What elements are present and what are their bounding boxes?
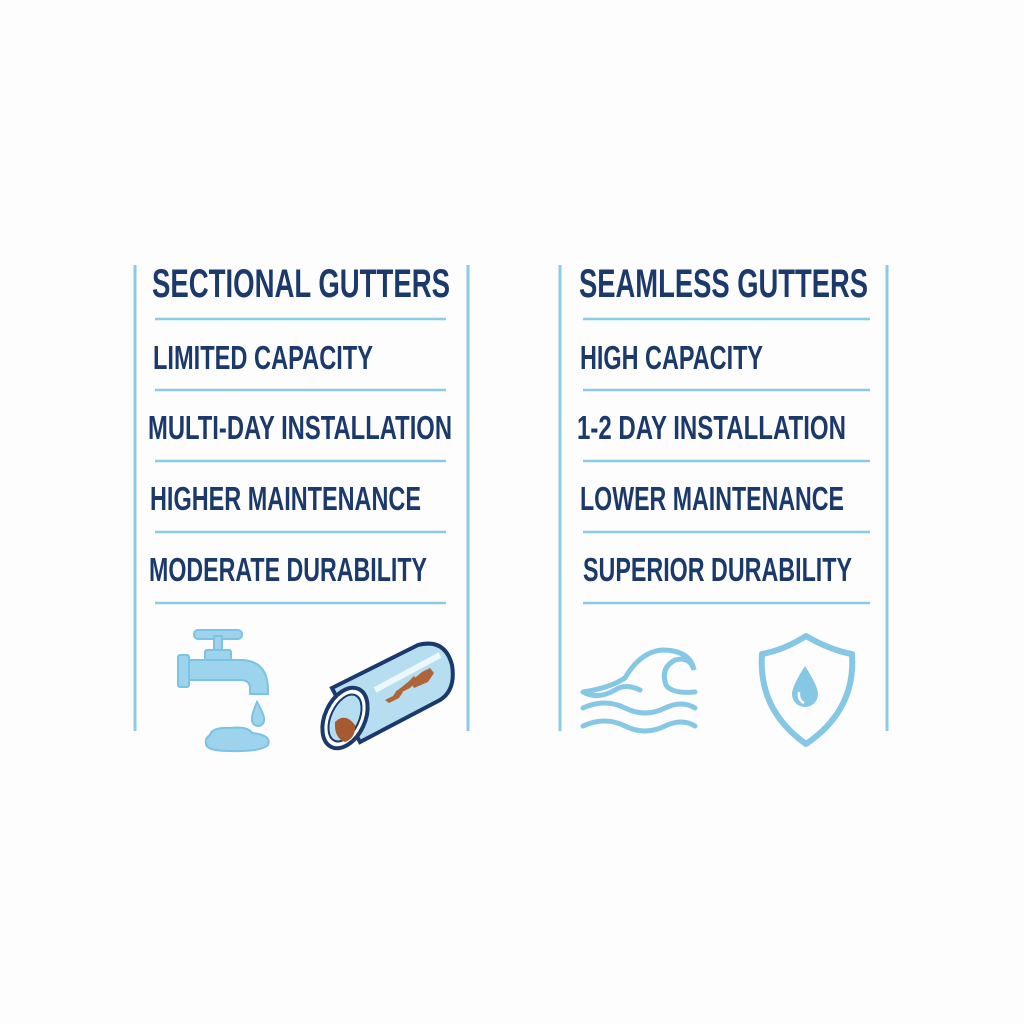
- text: moderate durability: MODERATE DURABILITY: [149, 551, 427, 588]
- panel: seamless gutters: [560, 262, 887, 744]
- text: superior durability: SUPERIOR DURABILITY: [583, 551, 852, 588]
- heading: seamless gutters: SEAMLESS GUTTERS: [579, 262, 868, 306]
- heading: sectional gutters: SECTIONAL GUTTERS: [152, 262, 450, 306]
- panel: sectional gutters: [135, 262, 468, 755]
- icon: rusted pipe: [305, 644, 453, 755]
- icon: waves: [583, 650, 695, 731]
- text: lower maintenance: LOWER MAINTENANCE: [580, 480, 844, 517]
- text: high capacity: HIGH CAPACITY: [580, 339, 763, 376]
- text: higher maintenance: HIGHER MAINTENANCE: [150, 480, 421, 517]
- icon: dripping faucet: [178, 630, 269, 751]
- icon: shield with drop: [762, 636, 852, 744]
- text: 1-2 day installation: 1-2 DAY INSTALLATION: [577, 409, 846, 446]
- text: multi-day installation: MULTI-DAY INSTALLATION: [148, 409, 452, 446]
- text: limited capacity: LIMITED CAPACITY: [153, 339, 373, 376]
